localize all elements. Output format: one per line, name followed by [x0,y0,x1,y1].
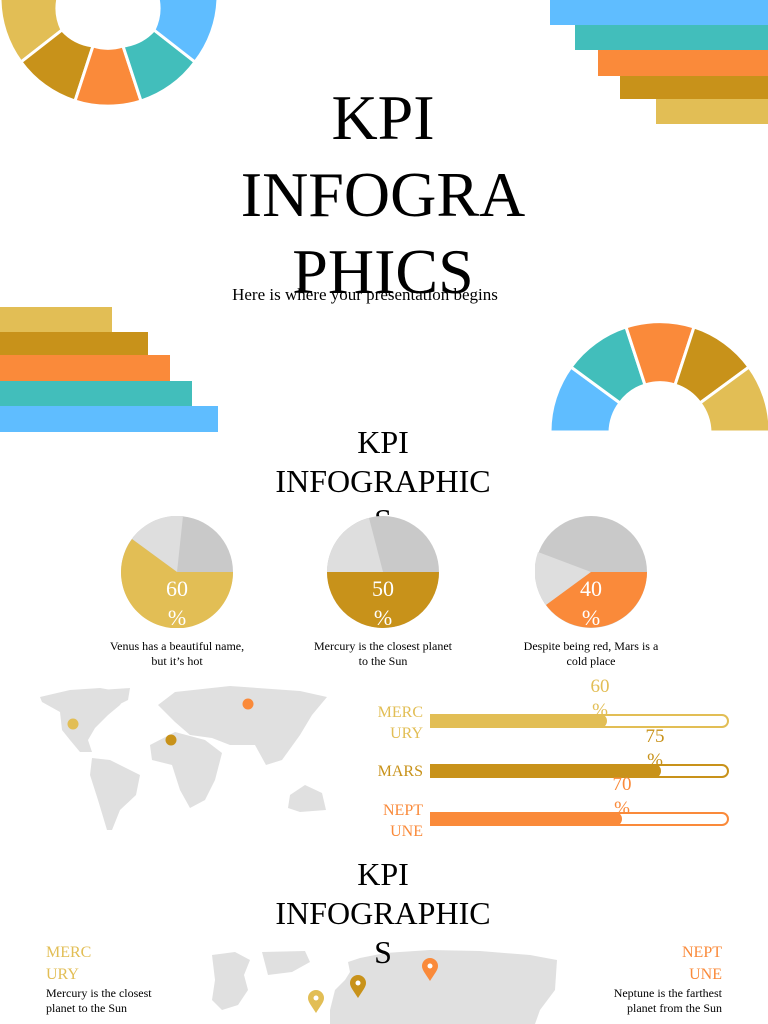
pie chart: 50% [327,516,439,630]
decoration: top-right stacked bars [550,0,768,124]
text block: mercury [46,944,152,1015]
decoration: left stacked bars [0,307,218,432]
text block: mercury: planet to the Sun [46,1001,127,1015]
progress: neptune: % [614,798,630,819]
text block: neptune: UNE [689,966,722,983]
decoration: bottom-right donut [552,323,768,430]
pie chart: 60%: 60 [166,576,188,601]
world map with dots [40,686,327,830]
title [241,82,525,307]
progress: mars: MARS [378,763,423,780]
dot: neptune [242,698,254,710]
heading 3: INFOGRAPHIC [275,895,491,931]
pin: mercury [308,990,324,1013]
caption: mars: Despite being red, Mars is a cold place [524,639,658,668]
pie chart: 50%: % [374,605,392,630]
heading 2: INFOGRAPHIC [275,463,491,499]
progress: neptune: 70 [612,774,632,795]
heading 2: KPI [357,424,409,460]
heading 3: S [374,934,392,970]
pie chart: 40% [535,516,647,630]
progress: mars [378,726,729,780]
pin: neptune [422,958,438,981]
text block: neptune: planet from the Sun [627,1001,722,1015]
heading 3 [275,856,491,970]
pin: mars [350,975,366,998]
text block: mercury: MERC [46,944,91,961]
text block: mercury: URY [46,966,79,983]
progress: mercury: URY [390,725,423,742]
progress: mars: % [647,750,663,771]
progress: mercury [378,676,729,742]
text block: neptune: Neptune is the farthest [614,986,722,1000]
progress: neptune: UNE [390,823,423,840]
title: KPI [331,82,435,153]
title: INFOGRA [241,159,525,230]
caption: mercury: Mercury is the closest planet to the Sun [314,639,452,668]
pie chart: 60%: % [168,605,186,630]
progress: mercury: MERC [378,704,423,721]
heading 3: KPI [357,856,409,892]
dot: mercury [68,718,78,730]
pie chart: 40%: 40 [580,576,602,601]
bottom world map with pins [212,950,557,1024]
subtitle: Here is where your presentation begins [232,285,498,304]
heading 2 [275,424,491,538]
decoration: top-left donut [2,0,216,105]
heading 2: S [374,502,392,538]
progress: neptune: NEPT [383,802,423,819]
text block: mercury: Mercury is the closest [46,986,152,1000]
dot: mars [166,734,176,746]
caption: venus: Venus has a beautiful name, but it’s hot [110,639,244,668]
progress: neptune [383,774,729,840]
title: PHICS [292,236,474,307]
progress: mercury: 60 [590,676,610,697]
pie chart: 40%: % [582,605,600,630]
progress bars [378,676,729,840]
pie chart: 60% [121,516,233,630]
text block: neptune [614,944,722,1015]
text block: neptune: NEPT [682,944,722,961]
progress: mars: 75 [646,726,664,747]
pie chart: 50%: 50 [372,576,394,601]
progress: mercury: % [592,700,608,721]
